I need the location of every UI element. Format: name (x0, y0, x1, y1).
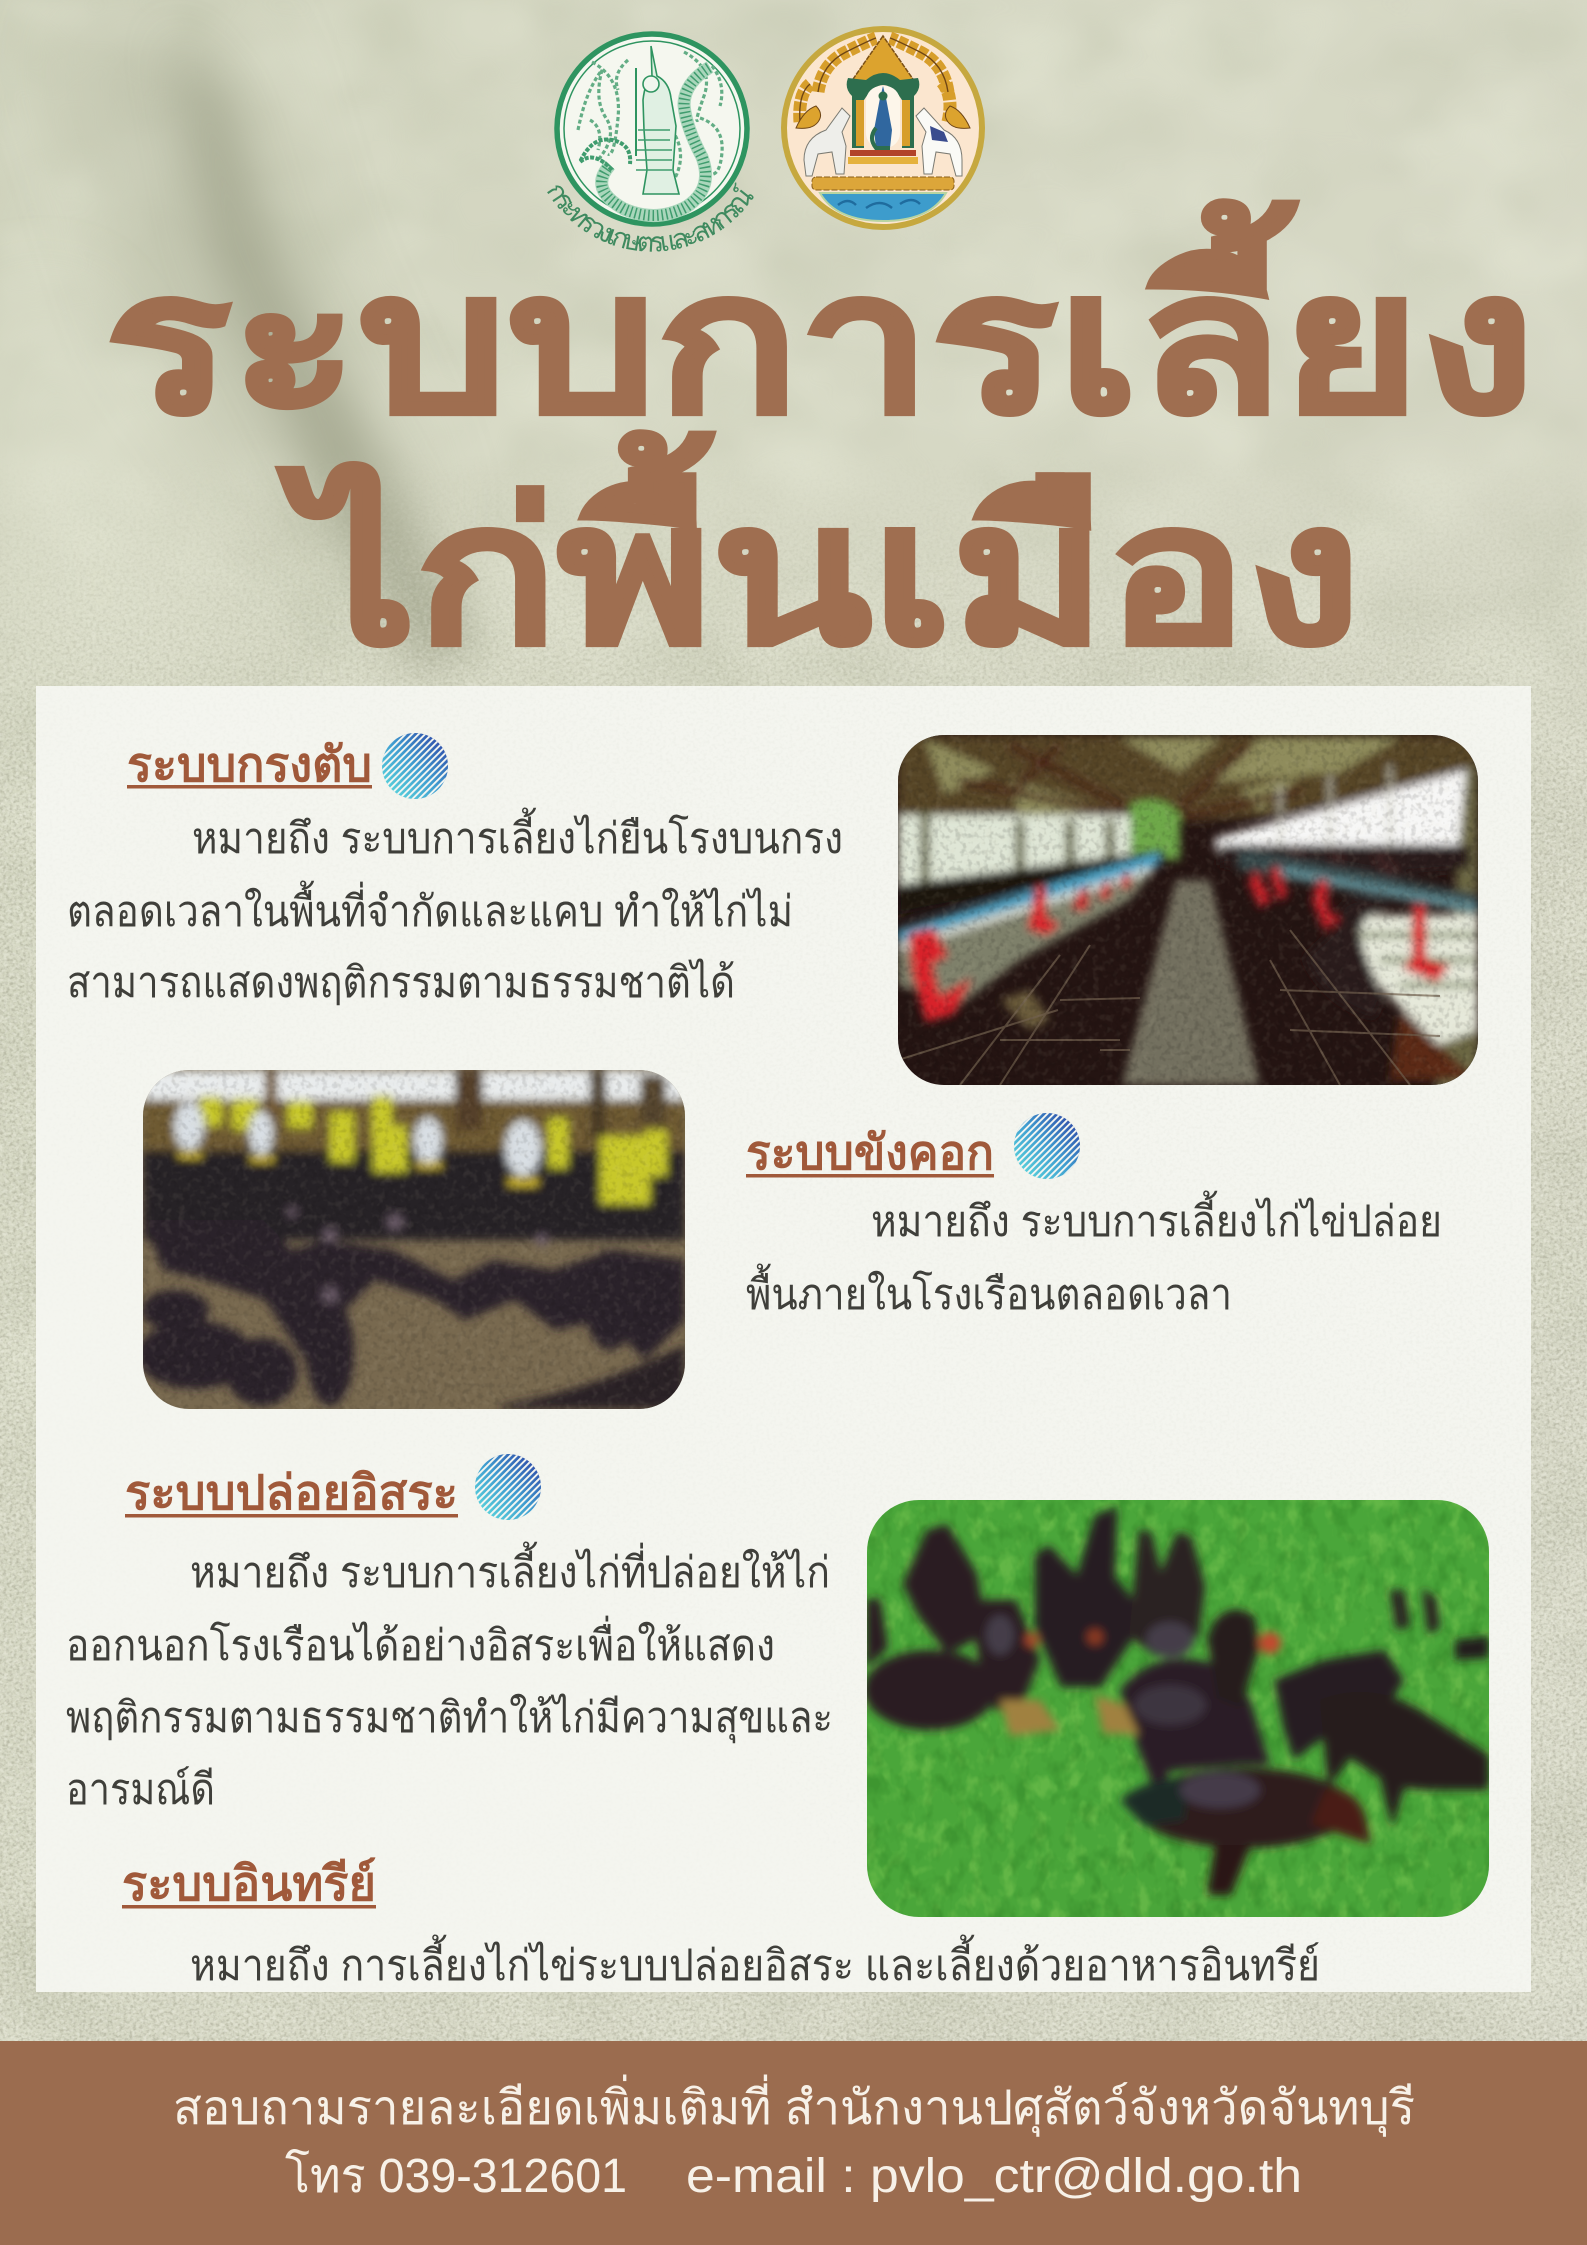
photo: closed house floor system (137, 1070, 685, 1409)
icon: striped circle (382, 733, 448, 799)
text: cage system description (67, 807, 843, 1007)
text: organic description: หมายถึง การเลี้ยงไก่ไข่ระบบปล่อยอิสระ และเลี้ยงด้วยอาหารอินทรีย์ (190, 1934, 1320, 1990)
footer contact text: โทร 039-312601 (285, 2148, 627, 2203)
heading: free-range system: ระบบปล่อยอิสระ (125, 1467, 458, 1520)
text: free-range description: อารมณ์ดี (66, 1766, 215, 1814)
photo: cage house (898, 735, 1478, 1092)
icon: striped circle (475, 1454, 541, 1520)
logo: ministry of agriculture seal (557, 34, 747, 224)
footer contact text: e-mail : pvlo_ctr@dld.go.th (686, 2150, 1302, 2203)
logo caption: ministry name on arc: กระทรวงเกษตรและสหกรณ์ (547, 182, 754, 252)
text: closed house description: พื้นภายในโรงเรือนตลอดเวลา (746, 1263, 1232, 1319)
title: ไก่พื้นเมือง (277, 431, 1361, 684)
heading: closed house system: ระบบขังคอก (746, 1127, 994, 1180)
footer bar (0, 2041, 1587, 2245)
text: closed house description: หมายถึง ระบบการเลี้ยงไก่ไข่ปล่อย (871, 1190, 1442, 1246)
logo: department of livestock seal (784, 29, 982, 227)
title (105, 200, 1535, 684)
photo: chickens on grass (864, 1500, 1489, 1917)
footer contact text (173, 2074, 1415, 2203)
content panel (36, 686, 1531, 1992)
text: cage system description: หมายถึง ระบบการเลี้ยงไก่ยืนโรงบนกรง (192, 807, 843, 863)
heading: cage system: ระบบกรงตับ (127, 739, 372, 792)
text: free-range description: หมายถึง ระบบการเลี้ยงไก่ที่ปล่อยให้ไก่ (190, 1541, 830, 1597)
text: free-range description: พฤติกรรมตามธรรมชาติทำให้ไก่มีความสุขและ (66, 1693, 833, 1744)
text: closed house description (746, 1190, 1442, 1319)
icon: striped circle (1014, 1113, 1080, 1179)
text: free-range description: ออกนอกโรงเรือนได้อย่างอิสระเพื่อให้แสดง (66, 1616, 775, 1670)
title: ระบบการเลี้ยง (105, 200, 1535, 453)
heading: organic system: ระบบอินทรีย์ (122, 1857, 376, 1911)
text: cage system description: สามารถแสดงพฤติกรรมตามธรรมชาติได้ (67, 958, 735, 1007)
footer contact text: สอบถามรายละเอียดเพิ่มเติมที่ สำนักงานปศุสัตว์จังหวัดจันทบุรี (173, 2074, 1415, 2137)
text: cage system description: ตลอดเวลาในพื้นที่จำกัดและแคบ ทำให้ไก่ไม่ (67, 880, 793, 936)
text: free-range description (66, 1541, 833, 1814)
